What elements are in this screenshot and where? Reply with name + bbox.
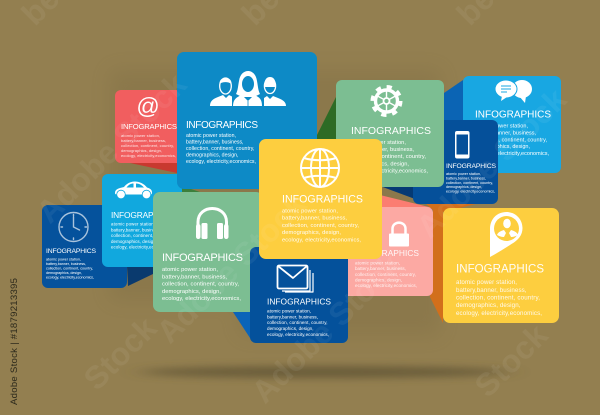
text block: lock panel: battery,banner, business, — [355, 266, 406, 271]
text block: globe panel: ecology, electricity,economics, — [282, 238, 361, 244]
text block: car panel: ecology, electricity,economics, — [111, 244, 172, 250]
icon: at sign: @ — [136, 93, 160, 119]
text block: blue panel: battery,banner, business, — [186, 140, 244, 146]
text block: car panel: battery,banner, business, — [111, 228, 161, 232]
panel: cyan car — [102, 174, 182, 267]
watermark text: Stock — [76, 310, 164, 397]
panel: yellow pin — [443, 208, 559, 323]
text block: globe panel — [282, 209, 361, 244]
side credit: Adobe Stock | #1879213395 — [9, 278, 20, 405]
text block: chat panel: atomic power station, — [475, 124, 528, 130]
icon: chat bubbles — [495, 80, 532, 103]
text block: car panel: demographics, design, — [111, 239, 157, 244]
panel: dark blue clock — [42, 205, 127, 288]
text block: clock panel: demographics, design, — [46, 271, 82, 275]
text block: red panel: atomic power station, — [121, 133, 160, 138]
panel: dark blue phone — [413, 120, 498, 204]
icon: car — [115, 182, 152, 199]
text block: pin panel: atomic power station, — [456, 279, 517, 286]
text block: phone panel — [446, 172, 495, 194]
text block: chat panel: battery,banner, business, — [475, 130, 536, 136]
icon: gear — [372, 87, 400, 115]
panel: green gear — [336, 80, 444, 187]
text block: phone panel: ecology, electricity,economics, — [446, 190, 495, 194]
text block: envelope panel: atomic power station, — [267, 309, 311, 314]
text block: red panel: demographics, design, — [121, 148, 162, 153]
text block: red panel: ecology, electricity,economics, — [121, 153, 176, 158]
text block: headphones panel: demographics, design, — [162, 289, 221, 295]
text block: red panel — [121, 133, 176, 158]
text block: car panel: collection, continent, country, — [111, 233, 171, 238]
text block: clock panel: ecology, electricity,economics, — [46, 276, 94, 280]
text block: headphones panel: ecology, electricity,economics, — [162, 296, 241, 302]
watermark text: Adobe Stock — [244, 246, 408, 410]
panel: cyan chat — [463, 76, 561, 173]
text block: gear panel: battery,banner, business, — [351, 147, 414, 153]
icon: smartphone — [455, 131, 470, 158]
text block: envelope panel — [267, 309, 329, 337]
text block: envelope panel: demographics, design, — [267, 326, 314, 331]
watermark text: Adobe Stock — [29, 66, 193, 230]
heading: lock panel: INFOGRAPHICS — [355, 248, 419, 258]
heading: phone panel: INFOGRAPHICS — [446, 163, 496, 170]
heading: clock panel: INFOGRAPHICS — [46, 248, 96, 255]
text block: pin panel: collection, continent, country, — [456, 294, 540, 302]
text block: clock panel: atomic power station, — [46, 258, 81, 262]
text block: headphones panel: atomic power station, — [162, 267, 218, 273]
watermark text: Stock — [467, 317, 555, 404]
text block: chat panel — [475, 124, 549, 157]
text block: blue panel: ecology, electricity,economics, — [186, 159, 256, 165]
panel: blue people — [177, 52, 317, 189]
background card folds — [127, 80, 480, 341]
text block: blue panel: atomic power station, — [186, 133, 236, 139]
soft shadow behind card cluster — [110, 70, 440, 335]
heading: globe panel: INFOGRAPHICS — [282, 194, 363, 206]
text block: clock panel — [46, 258, 94, 280]
icon: three people — [210, 71, 286, 106]
text block: phone panel: collection, continent, country, — [446, 181, 493, 185]
text block: lock panel: ecology, electricity,economics, — [355, 283, 417, 288]
text block: chat panel: ecology, electricity,economics, — [475, 151, 549, 157]
text block: blue panel: collection, continent, country, — [186, 146, 254, 152]
text block: gear panel: atomic power station, — [351, 140, 406, 146]
text block: red panel: battery,banner, business, — [121, 138, 166, 143]
watermark text: Adobe Stock — [409, 81, 573, 245]
icon: globe — [301, 149, 339, 187]
panel: blue envelope — [250, 247, 348, 343]
text block: lock panel — [355, 260, 417, 288]
text block: envelope panel: battery,banner, business, — [267, 314, 318, 320]
text block: envelope panel: ecology, electricity,economics, — [267, 332, 329, 337]
heading: pin panel: INFOGRAPHICS — [456, 264, 544, 276]
icon: padlock — [389, 223, 409, 246]
watermark text: Adobe Stock — [149, 186, 313, 350]
text block: headphones panel: collection, continent, country, — [162, 282, 239, 288]
heading: gear panel: INFOGRAPHICS — [351, 125, 431, 137]
text block: phone panel: atomic power station, — [446, 172, 481, 176]
text block: blue panel — [186, 133, 256, 165]
heading: red panel: INFOGRAPHICS — [121, 122, 177, 131]
heading: car panel: INFOGRAPHICS — [111, 210, 173, 220]
text block: clock panel: battery,banner, business, — [46, 262, 86, 266]
panel: red at sign — [115, 90, 195, 163]
text block: gear panel: collection, continent, country, — [351, 154, 426, 160]
text block: car panel: atomic power station, — [111, 222, 155, 227]
heading: headphones panel: INFOGRAPHICS — [162, 252, 243, 264]
text block: globe panel: battery,banner, business, — [282, 216, 347, 222]
text block: lock panel: demographics, design, — [355, 278, 402, 282]
text block: chat panel: demographics, design, — [475, 144, 530, 150]
text block: car panel — [111, 222, 172, 250]
icon: envelope — [278, 266, 313, 292]
text block: headphones panel: battery,banner, business, — [162, 274, 227, 280]
text block: headphones panel — [162, 267, 241, 302]
icon: clock — [59, 212, 88, 242]
panel: green headphones — [153, 192, 263, 312]
panel: yellow globe — [259, 139, 382, 259]
text block: globe panel: collection, continent, country, — [282, 223, 359, 229]
text block: globe panel: atomic power station, — [282, 209, 338, 215]
text block: phone panel: battery,banner, business, — [446, 176, 486, 180]
text block: pin panel: ecology, electricity,economics, — [456, 310, 542, 317]
text block: blue panel: demographics, design, — [186, 152, 238, 158]
text block: phone panel: demographics, design, — [446, 185, 482, 189]
icon: location pin with person — [490, 212, 522, 257]
text block: lock panel: atomic power station, — [355, 260, 400, 266]
text block: gear panel — [351, 140, 428, 174]
text block: clock panel: collection, continent, country, — [46, 266, 93, 270]
panel: pink lock — [340, 207, 433, 296]
text block: pin panel — [456, 279, 542, 317]
text block: lock panel: collection, continent, country, — [355, 272, 416, 277]
text block: gear panel: demographics, design, — [351, 162, 409, 168]
text block: envelope panel: collection, continent, country, — [267, 320, 328, 325]
heading: envelope panel: INFOGRAPHICS — [267, 297, 331, 307]
heading: blue panel: INFOGRAPHICS — [186, 120, 258, 131]
text block: pin panel: battery,banner, business, — [456, 287, 527, 294]
text block: red panel: collection, continent, country, — [121, 143, 174, 148]
text block: gear panel: ecology, electricity,economics, — [351, 168, 428, 174]
ground shadow — [140, 366, 510, 378]
heading: chat panel: INFOGRAPHICS — [475, 110, 551, 121]
text block: pin panel: demographics, design, — [456, 302, 521, 309]
icon: headphones — [196, 208, 228, 239]
text block: chat panel: collection, continent, country, — [475, 138, 547, 144]
text block: globe panel: demographics, design, — [282, 230, 341, 236]
